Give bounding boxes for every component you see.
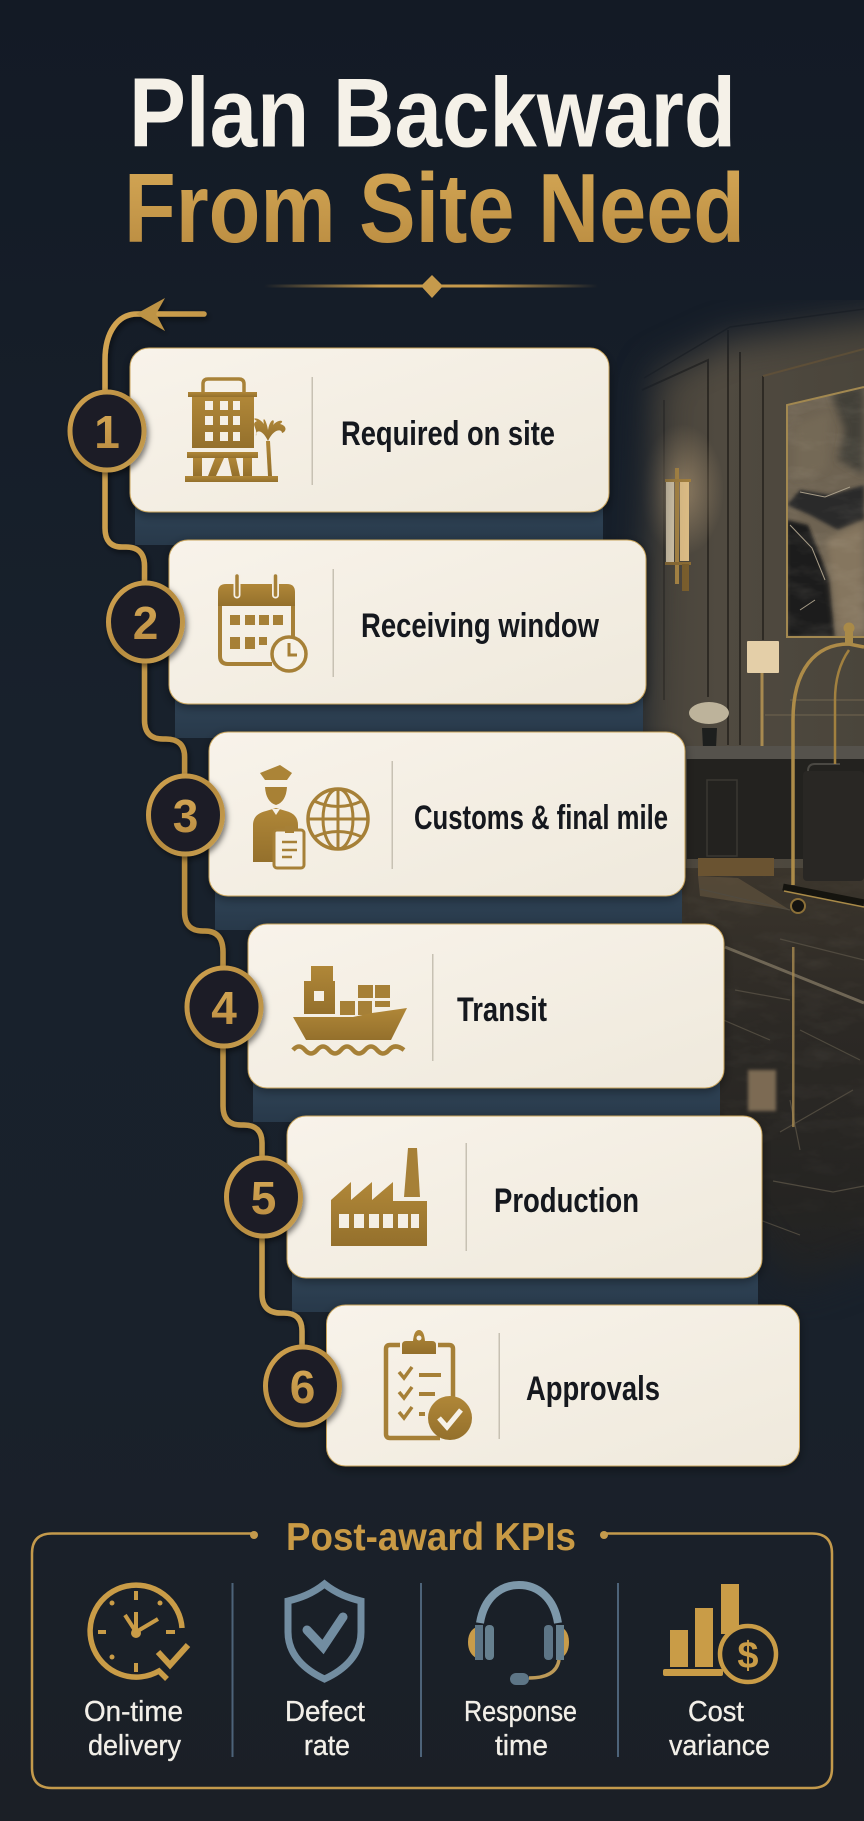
- table lamp: [747, 641, 779, 751]
- step number badges: [70, 392, 340, 1425]
- icon: clipboard with check badge: [386, 1330, 472, 1440]
- KPI: response time: time: [495, 1730, 548, 1762]
- painting frame: [787, 387, 864, 637]
- hotel lobby scene: [634, 302, 864, 1258]
- KPI: defect rate: [285, 1584, 365, 1762]
- label: Required on site: [341, 415, 555, 453]
- badge 3: [148, 776, 222, 854]
- icon: customs officer with globe: [253, 765, 368, 868]
- KPI: response time: [464, 1585, 577, 1762]
- badge 6: 6: [290, 1361, 315, 1413]
- column dividers: [232, 1583, 619, 1757]
- wall mouldings: [642, 309, 864, 745]
- badge 1: 1: [94, 406, 120, 458]
- badge 3: 3: [173, 790, 198, 842]
- title: From Site Need: [124, 153, 745, 263]
- KPI: on-time delivery: [84, 1585, 188, 1762]
- lobby wall: [634, 302, 864, 868]
- title: Plan Backward: [129, 58, 736, 168]
- step 6 card: [326, 1305, 800, 1466]
- console table: [686, 746, 864, 876]
- icon: shield with check: [288, 1584, 361, 1679]
- icon: calendar with clock: [218, 576, 306, 671]
- badge 1: [70, 392, 144, 470]
- wall sconce: [665, 468, 691, 591]
- badge 2: [108, 583, 182, 661]
- label: Defect: [285, 1696, 365, 1728]
- badge 4: 4: [211, 982, 237, 1034]
- label: Cost: [688, 1696, 744, 1728]
- timeline path with arrow: [105, 298, 302, 1350]
- badge 4: [187, 968, 261, 1046]
- sconce glow: [650, 432, 718, 548]
- panel frame: [32, 1531, 832, 1788]
- luggage cart: [783, 622, 864, 913]
- step connector blocks: [135, 505, 758, 1312]
- icon: headset: [468, 1585, 569, 1685]
- badge 5: [226, 1158, 300, 1236]
- divider: [392, 761, 393, 869]
- label: Response: [464, 1696, 577, 1728]
- KPI: cost variance: [663, 1584, 776, 1762]
- step 1 card: [130, 348, 609, 512]
- step 3 card: [209, 732, 685, 896]
- divider: [466, 1143, 467, 1251]
- icon: cargo ship: [293, 966, 407, 1054]
- flowers in vase: [689, 702, 729, 748]
- divider: [432, 954, 434, 1061]
- KPI: defect rate: rate: [304, 1730, 350, 1762]
- badge 2: 2: [133, 597, 158, 649]
- KPI: cost variance: variance: [669, 1730, 770, 1762]
- label: On-time: [84, 1696, 183, 1728]
- KPI: on-time delivery: delivery: [88, 1730, 181, 1762]
- icon: clock with check: [90, 1585, 188, 1679]
- label: Approvals: [526, 1370, 660, 1408]
- step 4 card: [248, 924, 724, 1088]
- divider: [498, 1333, 500, 1439]
- label: Receiving window: [361, 607, 599, 645]
- icon: bars with dollar coin: $: [737, 1635, 759, 1677]
- marble floor: [680, 868, 864, 1258]
- framed painting: [787, 385, 864, 640]
- label: Transit: [457, 991, 547, 1029]
- badge 6: [266, 1347, 340, 1425]
- title divider with diamond: [264, 275, 598, 298]
- panel: post-award KPIs: [32, 1516, 832, 1788]
- divider: [312, 377, 313, 485]
- divider: [332, 569, 334, 677]
- icon: hotel with palm tree: [185, 379, 286, 482]
- label: Customs & final mile: [414, 799, 668, 837]
- badge 5: 5: [251, 1172, 276, 1224]
- step 5 card: [287, 1116, 762, 1278]
- panel heading: Post-award KPIs: [286, 1516, 576, 1559]
- icon: bars with dollar coin: [663, 1584, 776, 1682]
- icon: factory: [331, 1148, 427, 1246]
- title: [124, 58, 745, 263]
- step 2 card: [169, 540, 646, 704]
- label: Production: [494, 1182, 639, 1220]
